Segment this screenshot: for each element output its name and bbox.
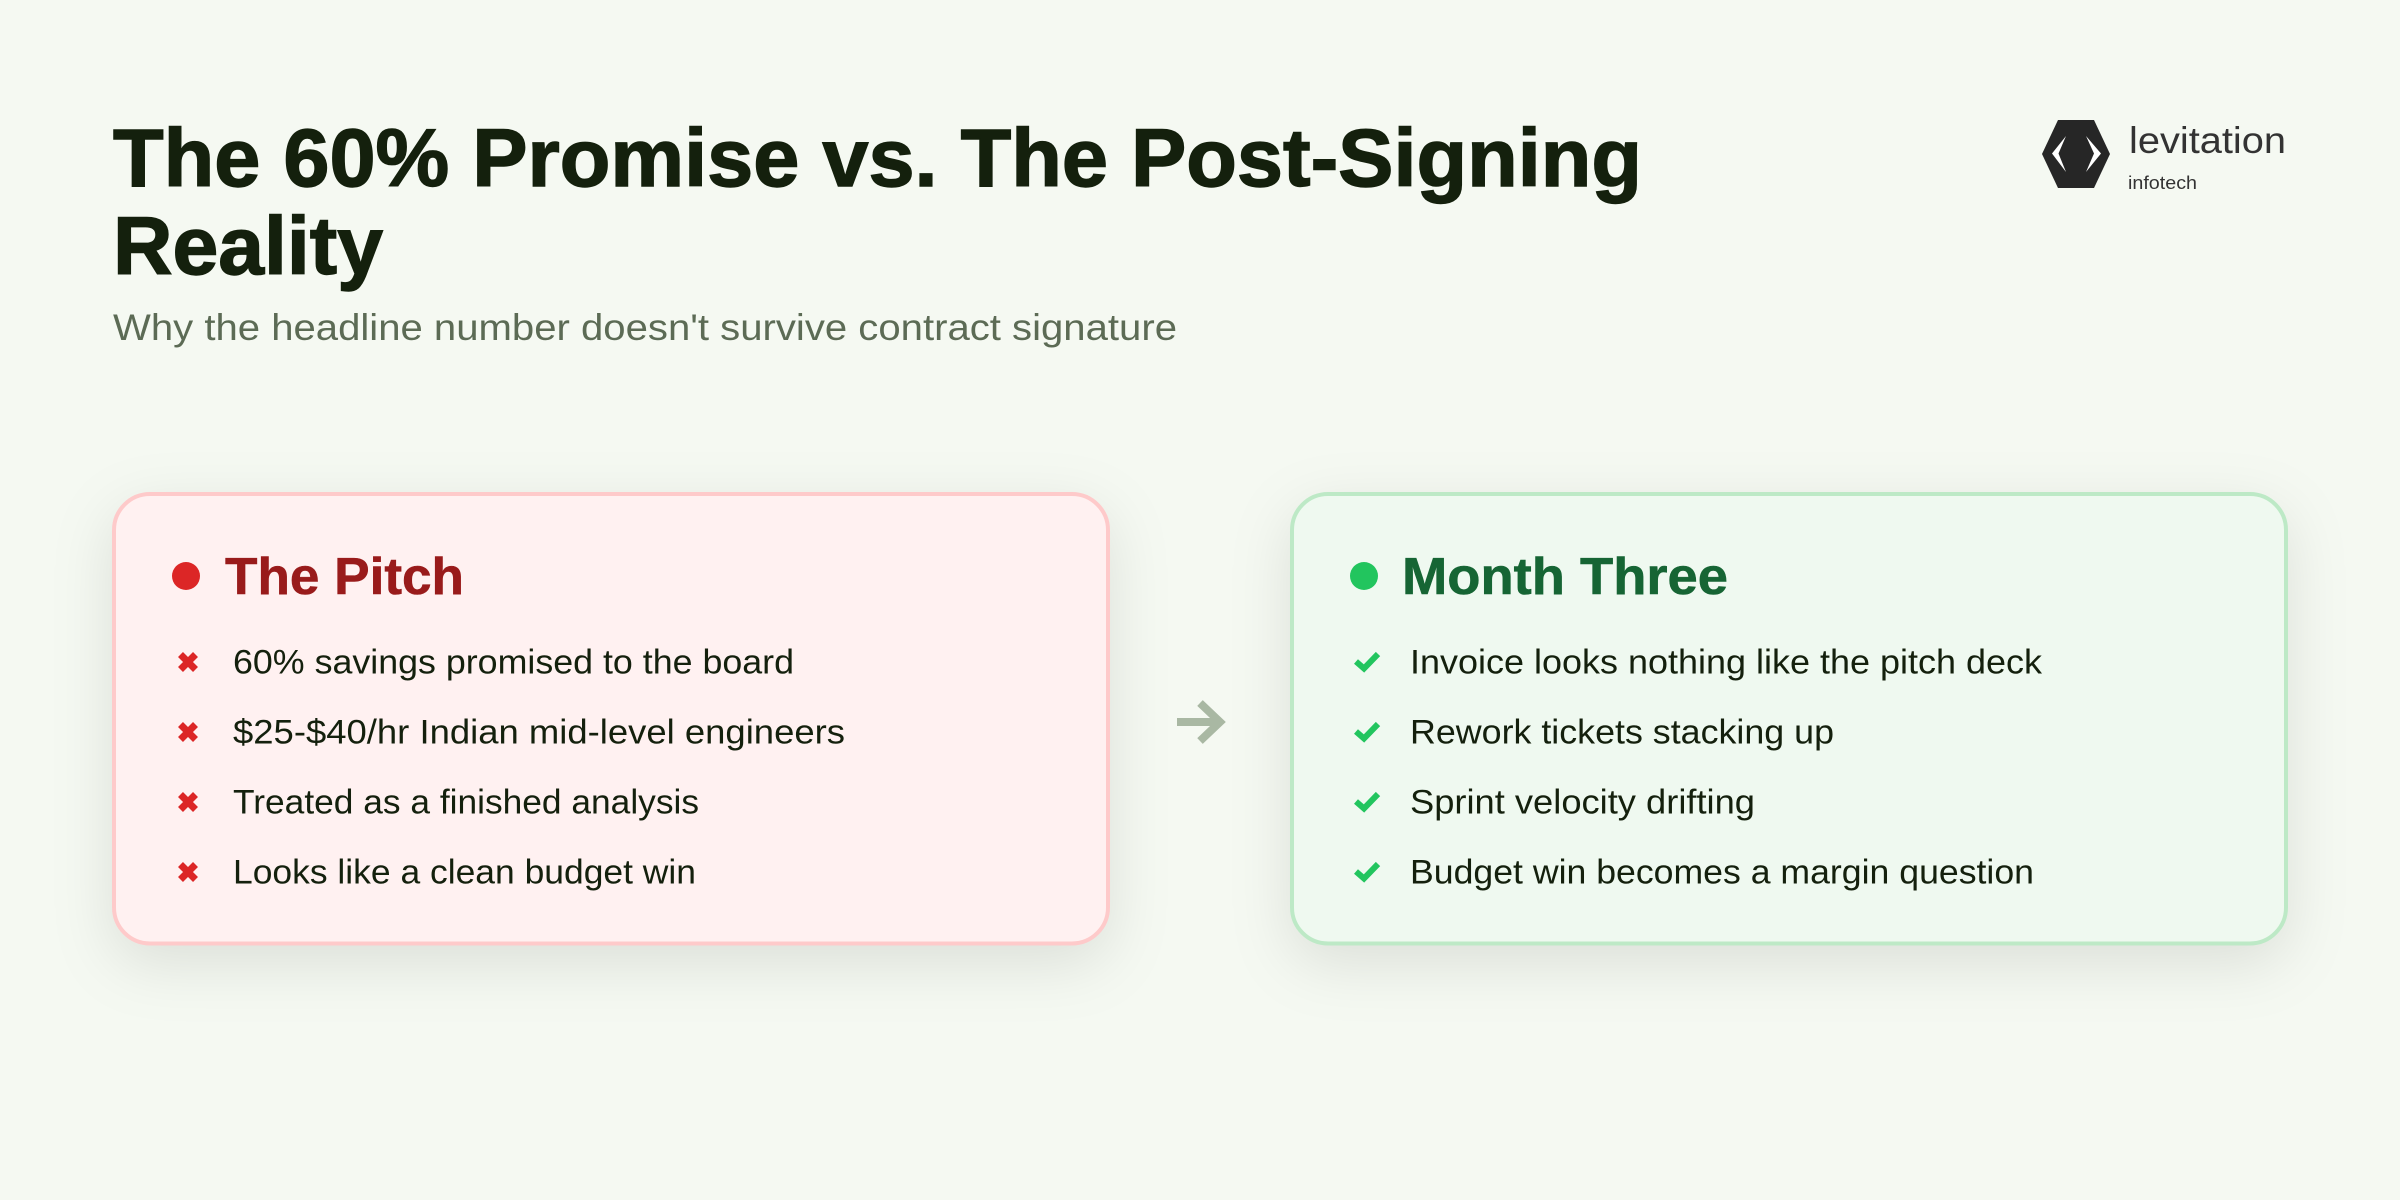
heading: the pitch: The Pitch [225, 548, 464, 606]
item: rework: Rework tickets stacking up [1410, 714, 1834, 752]
title [113, 113, 1642, 292]
logo tagline: infotech [2128, 173, 2197, 193]
title: Reality [113, 201, 383, 292]
item: finished analysis: Treated as a finished analysis [233, 784, 699, 822]
item: 60% savings: 60% savings promised to the board [233, 644, 794, 682]
heading: month three: Month Three [1402, 548, 1728, 606]
icon: hexagon logo mark [2042, 120, 2110, 188]
subtitle: Why the headline number doesn't survive contract signature [113, 307, 1177, 348]
item: budget win: Looks like a clean budget win [233, 854, 696, 892]
item: hourly rates: $25-$40/hr Indian mid-level engineers [233, 714, 845, 752]
card background [114, 494, 1108, 944]
panel: month three [1292, 494, 2286, 944]
card background [1292, 494, 2286, 944]
item: margin question: Budget win becomes a margin question [1410, 854, 2034, 892]
item: invoice: Invoice looks nothing like the pitch deck [1410, 644, 2043, 682]
panel: the pitch [114, 494, 1108, 944]
item: velocity: Sprint velocity drifting [1410, 784, 1755, 822]
arrow [1177, 703, 1220, 741]
logo: levitation infotech [2042, 120, 2286, 193]
logo wordmark: levitation [2129, 120, 2286, 161]
title: The 60% Promise vs. The Post-Signing [113, 113, 1642, 204]
